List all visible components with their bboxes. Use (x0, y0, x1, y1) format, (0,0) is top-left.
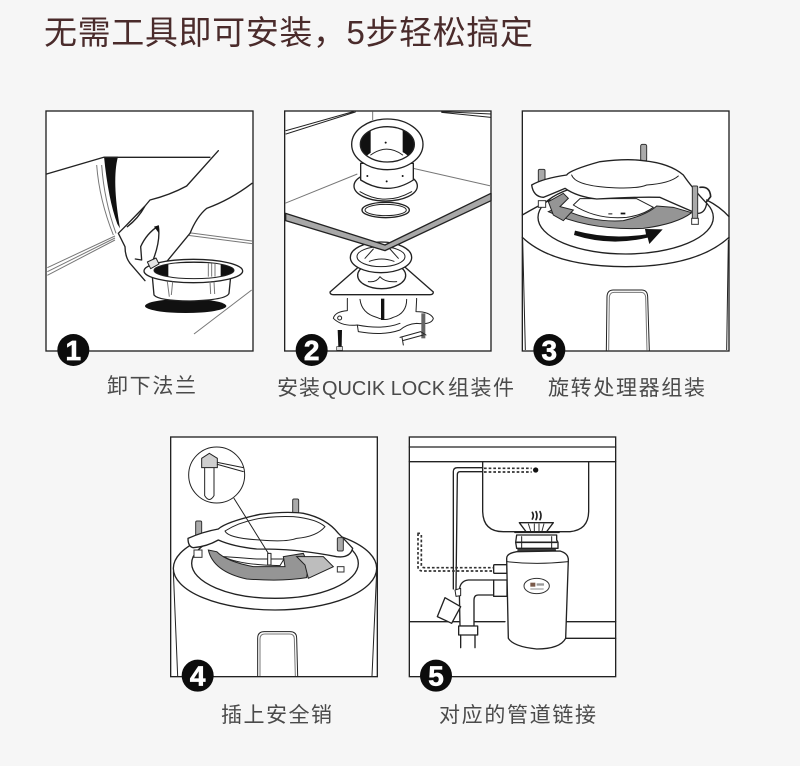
countertop edge lines (47, 233, 252, 275)
flange opening (153, 261, 235, 279)
counter lines (409, 447, 616, 638)
support bowl (358, 262, 406, 289)
panel: step 1 remove flange (46, 111, 253, 351)
badge 1 (57, 334, 89, 366)
flange opening (360, 126, 415, 163)
lower ring (350, 242, 412, 273)
window (258, 632, 298, 676)
pipe coupling (459, 626, 478, 635)
pin in detail (205, 468, 214, 499)
badge 2: 2 (304, 335, 319, 366)
front bolt (692, 186, 698, 224)
badge 4: 4 (190, 661, 206, 692)
ports (494, 565, 507, 573)
sink flange (519, 523, 553, 532)
flange bowl (152, 277, 231, 301)
detail line (234, 498, 268, 553)
label 4: 插上安全销 (221, 704, 332, 727)
lever right (700, 187, 711, 202)
gray ring (208, 550, 308, 580)
board edge (286, 193, 491, 251)
panel: step 4 insert safety pin (171, 437, 377, 677)
disposer top (173, 527, 377, 610)
plate inner edge (225, 517, 325, 541)
fingertip (147, 258, 159, 269)
label 1: 卸下法兰 (107, 375, 196, 398)
mounting ring (333, 299, 433, 333)
floor line (194, 290, 252, 334)
dotted pipe in sink (484, 468, 532, 472)
mount assembly (516, 535, 558, 548)
side cap (437, 598, 461, 623)
hole in board (362, 202, 409, 218)
rotation arrow (574, 229, 663, 244)
window (606, 290, 649, 351)
badge 1: 1 (66, 335, 81, 366)
rear bolts (538, 169, 545, 183)
body sides (523, 240, 728, 350)
label 2: 组装件 (448, 377, 514, 400)
lock lever left (548, 193, 573, 221)
hand fill (118, 151, 252, 281)
badge 3 (533, 334, 565, 366)
drain shadow (145, 299, 226, 313)
label 2: 安装 (277, 377, 320, 400)
bolts (381, 299, 384, 320)
label 3: 旋转处理器组装 (548, 377, 705, 400)
sleeve cuff (104, 157, 120, 228)
plate inner edge (572, 175, 678, 188)
label 2: QUCIK LOCK (322, 378, 446, 400)
badge 2 (296, 334, 328, 366)
panel: step 5 connect pipes (409, 437, 616, 677)
badge 3: 3 (542, 335, 557, 366)
triangle support (330, 247, 433, 295)
back edges (286, 112, 491, 134)
gasket ring (354, 171, 417, 201)
wrench (400, 332, 426, 345)
lever (297, 557, 333, 578)
label 5: 对应的管道链接 (439, 704, 596, 727)
top inner ring (538, 181, 713, 254)
hand outline (118, 151, 252, 281)
finger (135, 226, 159, 260)
flange rim (352, 119, 423, 170)
rear bolts (196, 521, 202, 536)
top inner ring (192, 528, 358, 598)
title: 无需工具即可安装，5步轻松搞定 (44, 14, 533, 51)
safety pin (268, 553, 271, 565)
panel: step 3 rotate disposer (522, 111, 729, 351)
body sides (173, 572, 377, 676)
panel: step 2 install quick lock (285, 111, 491, 351)
flange body (361, 163, 413, 188)
arm outline (47, 157, 210, 174)
badge 4 (182, 660, 214, 692)
detail circle (189, 447, 245, 503)
lower plate (223, 557, 284, 566)
gray ring (548, 206, 692, 229)
water lines (532, 512, 541, 520)
badge 5: 5 (428, 661, 444, 692)
dotted hose (417, 533, 493, 571)
air tube (453, 468, 483, 589)
flange rim (144, 259, 243, 283)
lower plate (573, 199, 653, 218)
badge 5 (420, 660, 452, 692)
disposer top (522, 200, 729, 267)
mounting plate (188, 512, 353, 557)
front bolt (337, 538, 343, 551)
drain pipe (459, 580, 494, 626)
disposer body (507, 551, 568, 649)
cuff fold lines (97, 165, 116, 235)
logo badge (524, 578, 549, 594)
sink (483, 462, 589, 532)
mounting plate (532, 160, 707, 213)
